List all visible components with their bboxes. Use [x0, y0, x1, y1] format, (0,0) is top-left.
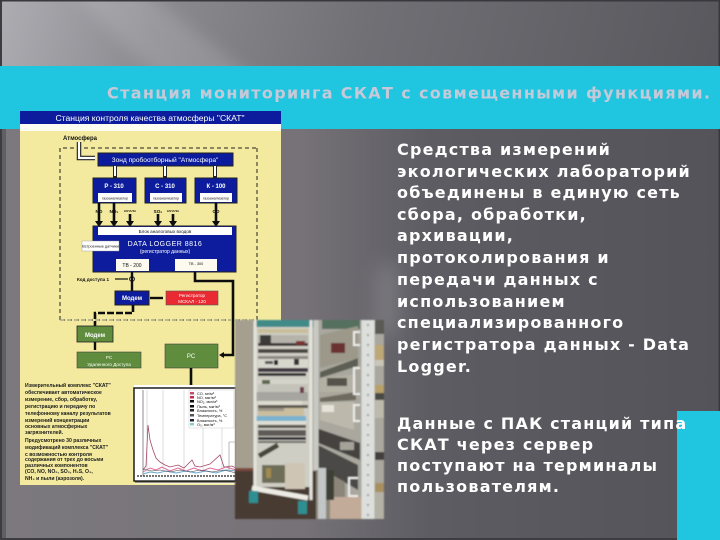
description text: (CO, NO, NO₂, SO₂, H₂S, O₃,: [25, 469, 93, 475]
analyzer G-310: [145, 178, 186, 203]
chart legend: Влажность, %: [197, 418, 223, 423]
description text: основных атмосферных: [25, 423, 88, 430]
text block: server delivery: Данные с ПАК станций типа: [397, 414, 687, 433]
analyzer K-100: [195, 178, 237, 203]
diagram header: [20, 111, 281, 124]
chart legend: CO, мг/м³: [197, 391, 215, 396]
description text: [25, 382, 111, 482]
description text: обеспечивает автоматическое: [25, 389, 102, 396]
text block: data logger description: Средства измерений: [397, 140, 611, 159]
recorder: МСКАЛ - 120: [178, 299, 206, 304]
data logger: [93, 226, 236, 272]
chart legend: [189, 390, 234, 428]
atmosphere label: Атмосфера: [63, 135, 98, 142]
analyzer K-100: газоанализатор: [203, 196, 229, 200]
description text: измерение, сбор, обработку,: [25, 396, 98, 403]
diagram header: Станция контроля качества атмосферы "СКАТ": [55, 113, 245, 123]
access label and link: Код доступа 1: [77, 277, 109, 282]
analyzer P-310: газоанализатор: [102, 196, 128, 200]
dashed bottom edge: [60, 319, 257, 321]
probe box: Зонд пробоотборный "Атмосфера": [112, 156, 219, 164]
text block: server delivery: СКАТ через сервер: [397, 435, 594, 454]
data logger: Блок аналоговых входов: [139, 229, 192, 234]
text block: server delivery: [397, 414, 687, 496]
link modem to pc: [94, 342, 96, 350]
chart legend: Пыль, мкг/м³: [197, 404, 221, 409]
probe outlets: [115, 166, 215, 178]
chart legend: NO, мкг/м³: [197, 395, 217, 400]
text block: data logger description: [397, 140, 691, 376]
description text: Измерительный комплекс "СКАТ": [25, 382, 111, 389]
description text: различных компонентов: [25, 463, 88, 469]
wall and floor: [235, 320, 384, 519]
text block: data logger description: сбора, обработки,: [397, 205, 587, 224]
line chart: [134, 385, 236, 484]
description text: телефонному каналу результатов: [25, 410, 111, 417]
chart legend: O₃, мкг/м³: [197, 422, 215, 427]
description text: с возможностью контроля: [25, 452, 92, 458]
description text: измерений концентрации: [25, 417, 89, 424]
white frames: [349, 332, 360, 496]
description text: модификаций комплекса "СКАТ": [25, 444, 109, 451]
data logger: (регистратор данных): [140, 249, 190, 255]
thick data line: [195, 272, 233, 358]
analyzer outputs: NO: [96, 209, 103, 214]
text block: data logger description: использованием: [397, 292, 566, 311]
remote pc: [77, 352, 141, 368]
description text: загрязнителей.: [25, 429, 64, 436]
analyzer G-310: С - 310: [155, 184, 175, 190]
dashed link to remote modem: [95, 305, 133, 326]
data logger: TB - 300: [189, 262, 203, 266]
description text: NH₃ и пыли (аэрозоля).: [25, 476, 85, 482]
first rack: [249, 320, 315, 514]
analyzer outputs: [95, 203, 220, 227]
analyzer outputs: каналы: [124, 209, 137, 213]
text block: data logger description: передачи данных с: [397, 270, 599, 289]
text block: data logger description: архивации,: [397, 226, 514, 245]
inlet arrow: [79, 142, 95, 158]
uprights: [314, 320, 318, 470]
recorder: Регистратор: [179, 293, 206, 298]
data logger: DATA LOGGER 8816: [128, 241, 202, 248]
analyzer outputs: CO: [213, 209, 220, 214]
remote pc: PC: [106, 355, 113, 360]
second rack: [316, 320, 384, 519]
modem: [115, 291, 149, 305]
text block: data logger description: специализированного: [397, 313, 624, 332]
text block: data logger description: Logger.: [397, 357, 472, 376]
diagram page background: [20, 124, 281, 485]
description text: содержания от трех до восьми: [25, 457, 103, 463]
text block: data logger description: экологических лабораторий: [397, 162, 691, 181]
analyzer P-310: [93, 178, 136, 203]
text block: data logger description: регистратора данных - Data: [397, 335, 690, 354]
chart legend: Влажность, %: [197, 408, 223, 413]
text block: server delivery: поступают на терминалы: [397, 456, 658, 475]
text block: data logger description: протоколирования и: [397, 248, 610, 267]
title band: [0, 66, 720, 129]
external sensors label: [82, 241, 119, 251]
title: Станция мониторинга СКАТ с совмещенными функциями.: [107, 84, 710, 102]
probe box: [98, 153, 233, 166]
panel: station diagram: [20, 111, 281, 485]
remote modem: [77, 326, 113, 342]
accent block: bottom right: [677, 411, 720, 540]
description text: Предусмотрено 30 различных: [25, 438, 101, 444]
dashed enclosure: [60, 148, 257, 320]
recorder: [166, 291, 218, 305]
local pc: PC: [187, 354, 196, 360]
external sensors label: Встроенные датчики: [82, 244, 119, 248]
local pc: [165, 344, 218, 368]
photo: equipment racks: [235, 320, 384, 519]
remote modem: Модем: [85, 333, 106, 339]
modem: Модем: [122, 296, 143, 302]
remote pc: Удаленного Доступа: [87, 362, 131, 367]
right shelves: [375, 320, 384, 334]
shelf contents: [259, 445, 278, 456]
data logger: TB - 200: [122, 263, 142, 269]
rack feet: [249, 491, 258, 503]
chart legend: Температура, °С: [197, 413, 227, 418]
access label and link: [77, 272, 134, 291]
chart legend: NO₂, мкг/м³: [197, 399, 218, 404]
arrow to recorder: [150, 297, 163, 299]
link pc to chart: [190, 368, 192, 388]
analyzer outputs: SO₂: [154, 209, 162, 214]
text block: data logger description: объединены в единую сеть: [397, 183, 681, 202]
analyzer P-310: Р - 310: [104, 184, 124, 190]
analyzer outputs: каналы: [167, 209, 180, 213]
analyzer G-310: газоанализатор: [153, 196, 179, 200]
analyzer K-100: К - 100: [206, 184, 226, 190]
text block: server delivery: пользователям.: [397, 477, 560, 496]
analyzer outputs: NO₂: [110, 209, 118, 214]
description text: регистрацию и передачу по: [25, 404, 95, 410]
